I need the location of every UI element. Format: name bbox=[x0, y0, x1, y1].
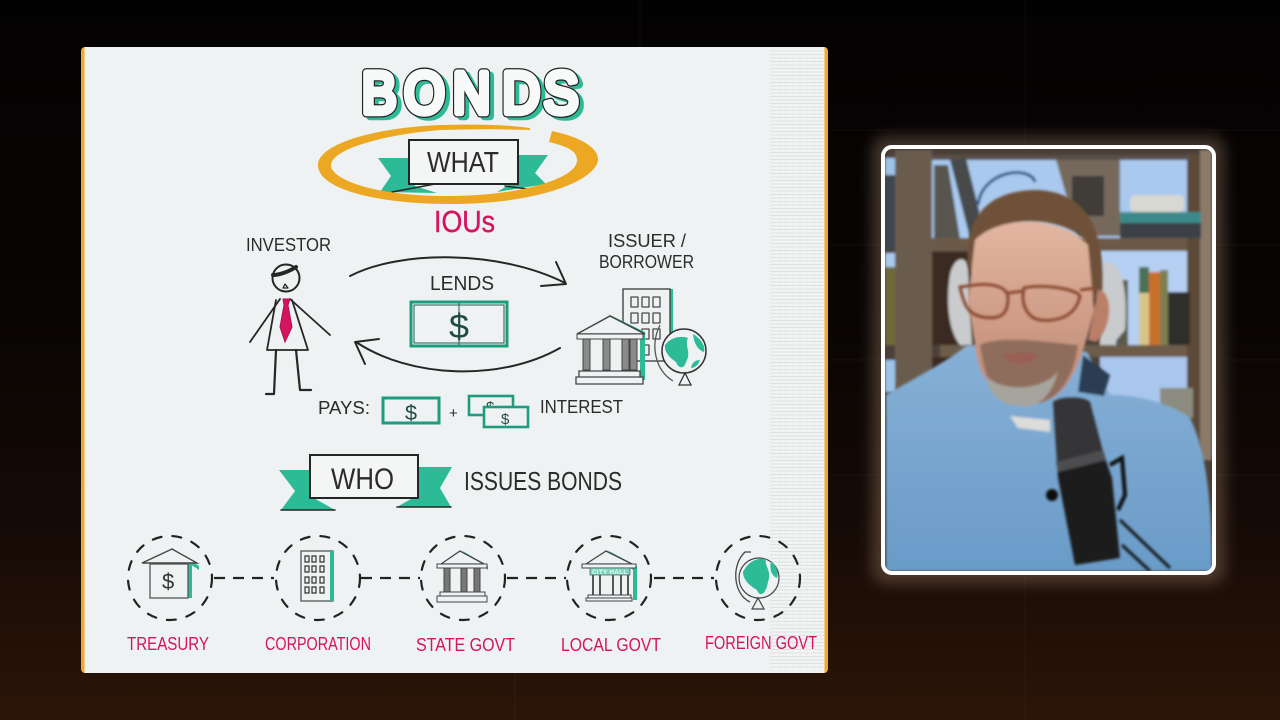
icon: interest dollar bills bbox=[469, 396, 528, 428]
plus sign: + bbox=[449, 405, 458, 422]
who ribbon heading: WHO bbox=[331, 463, 394, 496]
scene: bookshelf background bbox=[885, 149, 1212, 500]
interest label: INTEREST bbox=[540, 397, 623, 417]
pays label: PAYS: bbox=[318, 398, 370, 418]
icon: microphone bbox=[1046, 398, 1170, 571]
icon: large dollar bill: $ bbox=[449, 308, 469, 346]
issuer: treasury bbox=[128, 536, 212, 620]
issuer: local govt bbox=[567, 536, 651, 620]
icon: principal dollar bill bbox=[383, 398, 439, 425]
issuer label: ISSUER / bbox=[608, 231, 686, 251]
pays arrow bbox=[355, 339, 560, 371]
issuer: local govt: CITY HALL bbox=[592, 570, 627, 576]
panel: bonds notes paper bbox=[81, 47, 828, 673]
icon: issuer buildings and globe bbox=[576, 289, 706, 385]
issuer: treasury: $ bbox=[162, 569, 174, 594]
issuer label: BORROWER bbox=[599, 252, 694, 272]
issuer: state govt bbox=[421, 536, 505, 620]
label: state govt: STATE GOVT bbox=[416, 635, 515, 655]
lends arrow bbox=[350, 257, 566, 286]
who ribbon heading bbox=[279, 455, 452, 510]
icon: glasses bbox=[960, 284, 1095, 320]
icon: interest dollar bills: $ bbox=[486, 399, 495, 416]
issuer: foreign govt bbox=[716, 536, 800, 620]
issuer chain connectors bbox=[214, 577, 714, 579]
icon: interest dollar bills: $ bbox=[501, 411, 510, 428]
lends label: LENDS bbox=[430, 273, 494, 295]
icon: principal dollar bill: $ bbox=[405, 402, 417, 425]
issues bonds heading: ISSUES BONDS bbox=[464, 466, 622, 496]
title: BONDS bbox=[366, 63, 582, 129]
label: foreign govt: FOREIGN GOVT bbox=[705, 633, 817, 653]
what ribbon heading bbox=[378, 140, 548, 193]
icon: large dollar bill bbox=[411, 302, 507, 346]
orange hand-drawn ellipse bbox=[318, 125, 598, 204]
issuer label bbox=[599, 231, 694, 272]
what ribbon heading: WHAT bbox=[427, 147, 499, 179]
icon: investor stick figure bbox=[250, 264, 330, 394]
title: BONDS bbox=[362, 60, 578, 126]
photo frame bbox=[883, 147, 1214, 573]
label: corporation: CORPORATION bbox=[265, 634, 371, 654]
title: BONDS bbox=[362, 60, 578, 126]
investor label: INVESTOR bbox=[246, 235, 331, 255]
scene: presenter bbox=[886, 190, 1212, 571]
label: local govt: LOCAL GOVT bbox=[561, 635, 661, 655]
IOUs label: IOUs bbox=[434, 204, 495, 239]
issuer: corporation bbox=[276, 536, 360, 620]
panel: presenter video bbox=[872, 136, 1225, 584]
label: treasury: TREASURY bbox=[127, 634, 209, 654]
